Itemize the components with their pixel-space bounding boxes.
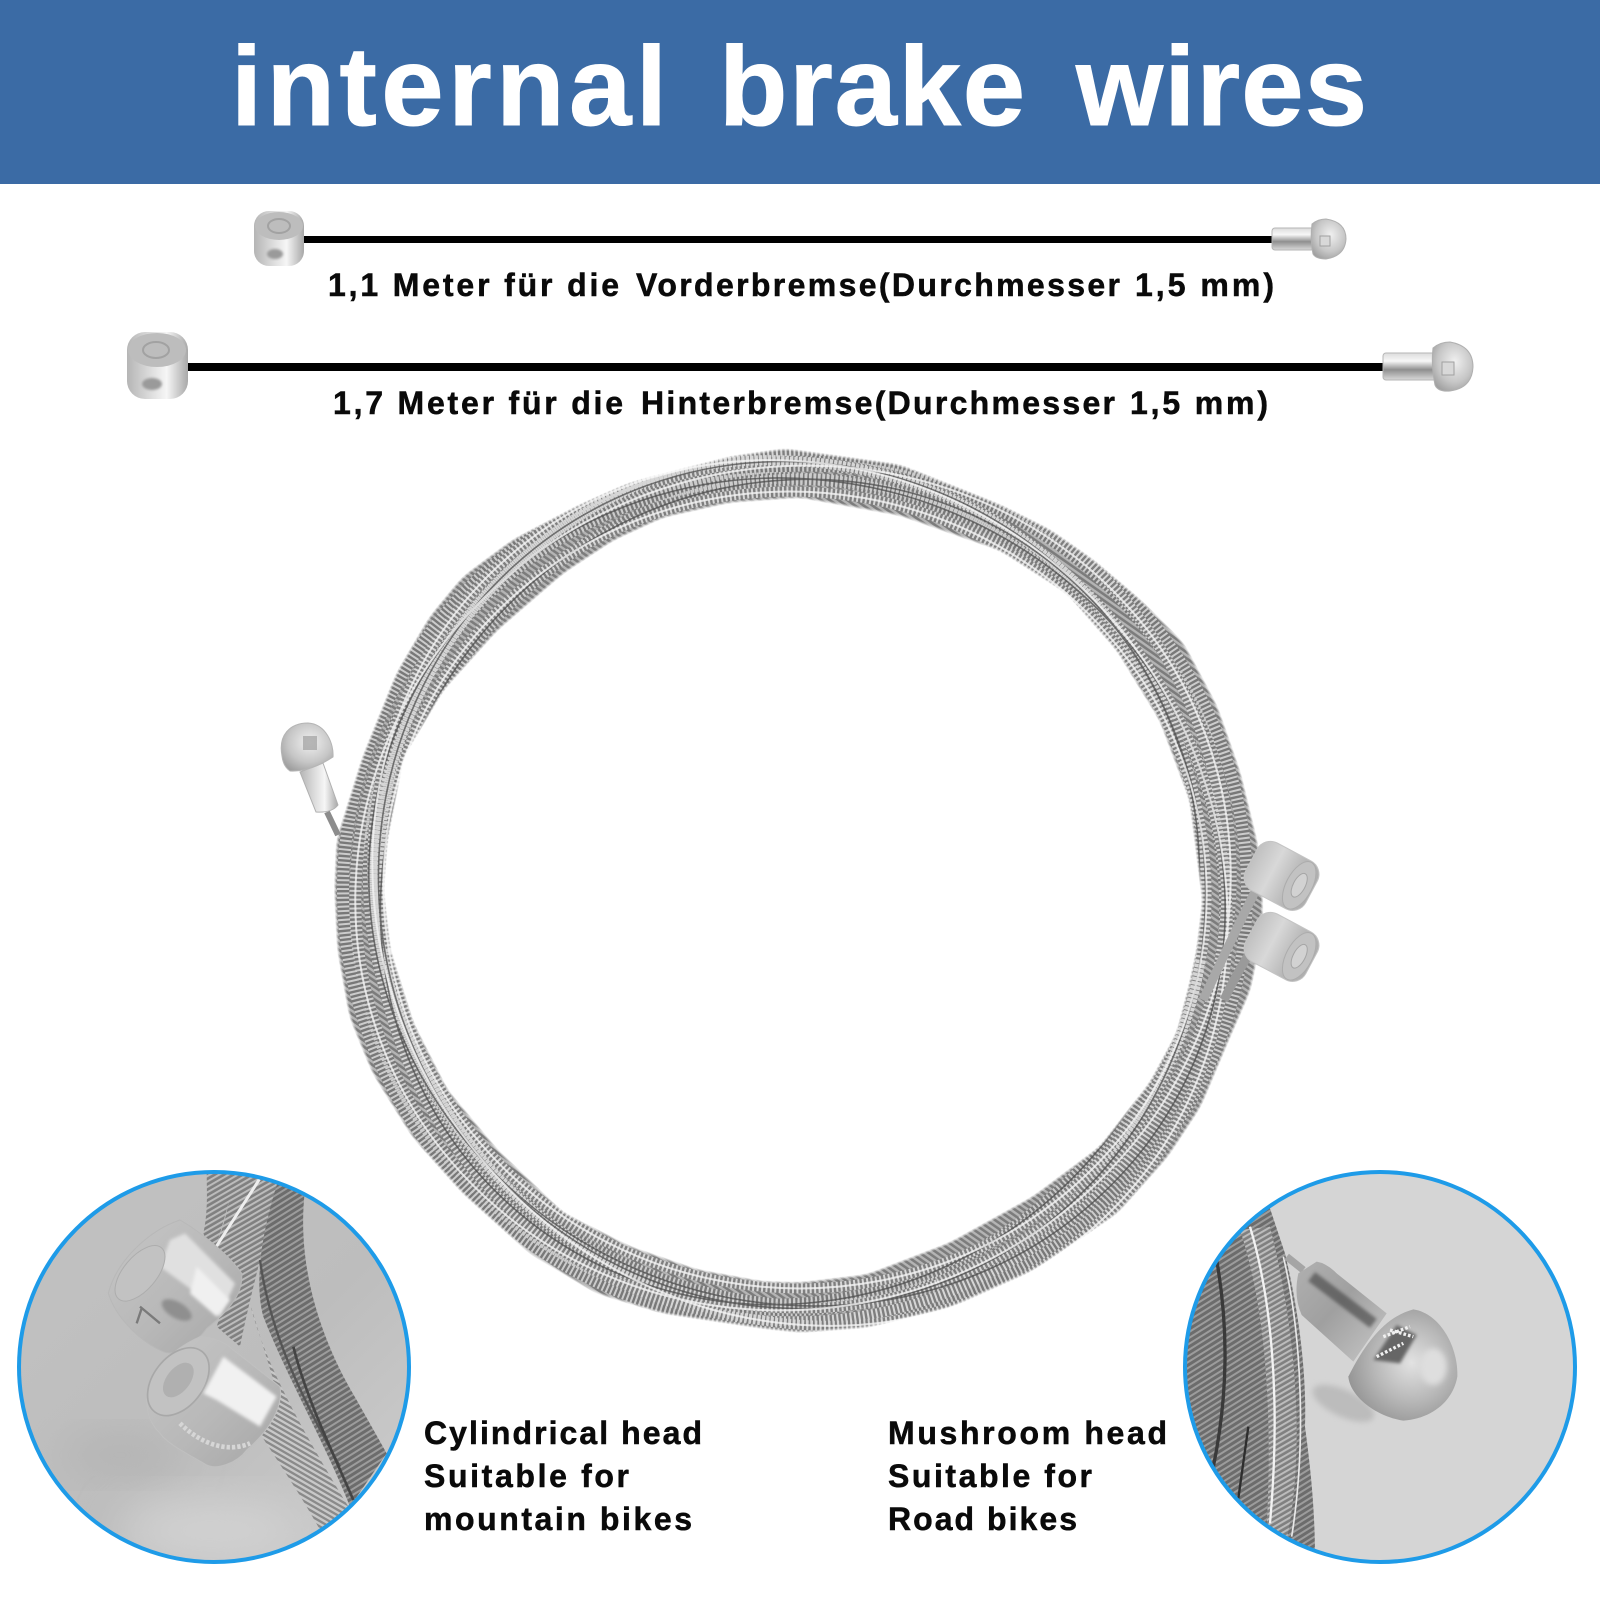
title: internal — [231, 24, 667, 149]
front brake wire label — [328, 267, 1274, 303]
cable ends into cylinders — [1224, 940, 1258, 1000]
rear brake wire label: Hinterbremse(Durchmesser — [641, 385, 1115, 421]
mushroom head caption: Road bikes — [888, 1501, 1077, 1537]
title: wires — [1075, 24, 1367, 149]
head — [1348, 1309, 1457, 1421]
icon: mushroom head on coil — [281, 723, 338, 835]
cylindrical head caption: Cylindrical head — [424, 1415, 702, 1451]
icon: mushroom head large — [1383, 342, 1473, 391]
icon: upper cylinder on coil — [1239, 836, 1324, 916]
coiled brake cable — [280, 448, 1320, 1333]
icon: cylindrical head large — [127, 332, 188, 399]
mushroom head caption — [888, 1415, 1167, 1537]
mushroom head caption: Mushroom head — [888, 1415, 1167, 1451]
cylindrical head caption: Suitable for — [424, 1458, 629, 1494]
icon: cylindrical head small — [254, 211, 304, 266]
inset: cylindrical head close-up — [17, 1170, 411, 1564]
coil band — [334, 448, 1263, 1333]
icon: lower cylinder on coil — [1239, 907, 1324, 987]
strands — [1183, 1203, 1315, 1560]
rear brake wire label: 1,7 Meter für die — [333, 385, 623, 421]
strands — [204, 1174, 233, 1245]
front brake wire diagram — [254, 211, 1346, 266]
cylindrical head caption — [424, 1415, 702, 1537]
icon: mushroom head small — [1272, 219, 1346, 259]
title banner — [0, 0, 1600, 184]
rear brake wire label: 1,5 mm) — [1130, 385, 1268, 421]
front brake wire label: 1,1 Meter für die — [328, 267, 619, 303]
lower cylinder — [176, 1337, 281, 1466]
stem — [1287, 1257, 1303, 1270]
cylindrical head caption: mountain bikes — [424, 1501, 692, 1537]
front brake wire label: 1,5 mm) — [1135, 267, 1274, 303]
title: brake — [719, 24, 1025, 149]
mushroom head caption: Suitable for — [888, 1458, 1092, 1494]
inset: mushroom head close-up — [1183, 1170, 1577, 1564]
upper cylinder — [144, 1238, 242, 1352]
title — [231, 24, 1367, 149]
rear brake wire label — [333, 385, 1268, 421]
rear brake wire diagram — [127, 332, 1473, 399]
front brake wire label: Vorderbremse(Durchmesser — [636, 267, 1120, 303]
